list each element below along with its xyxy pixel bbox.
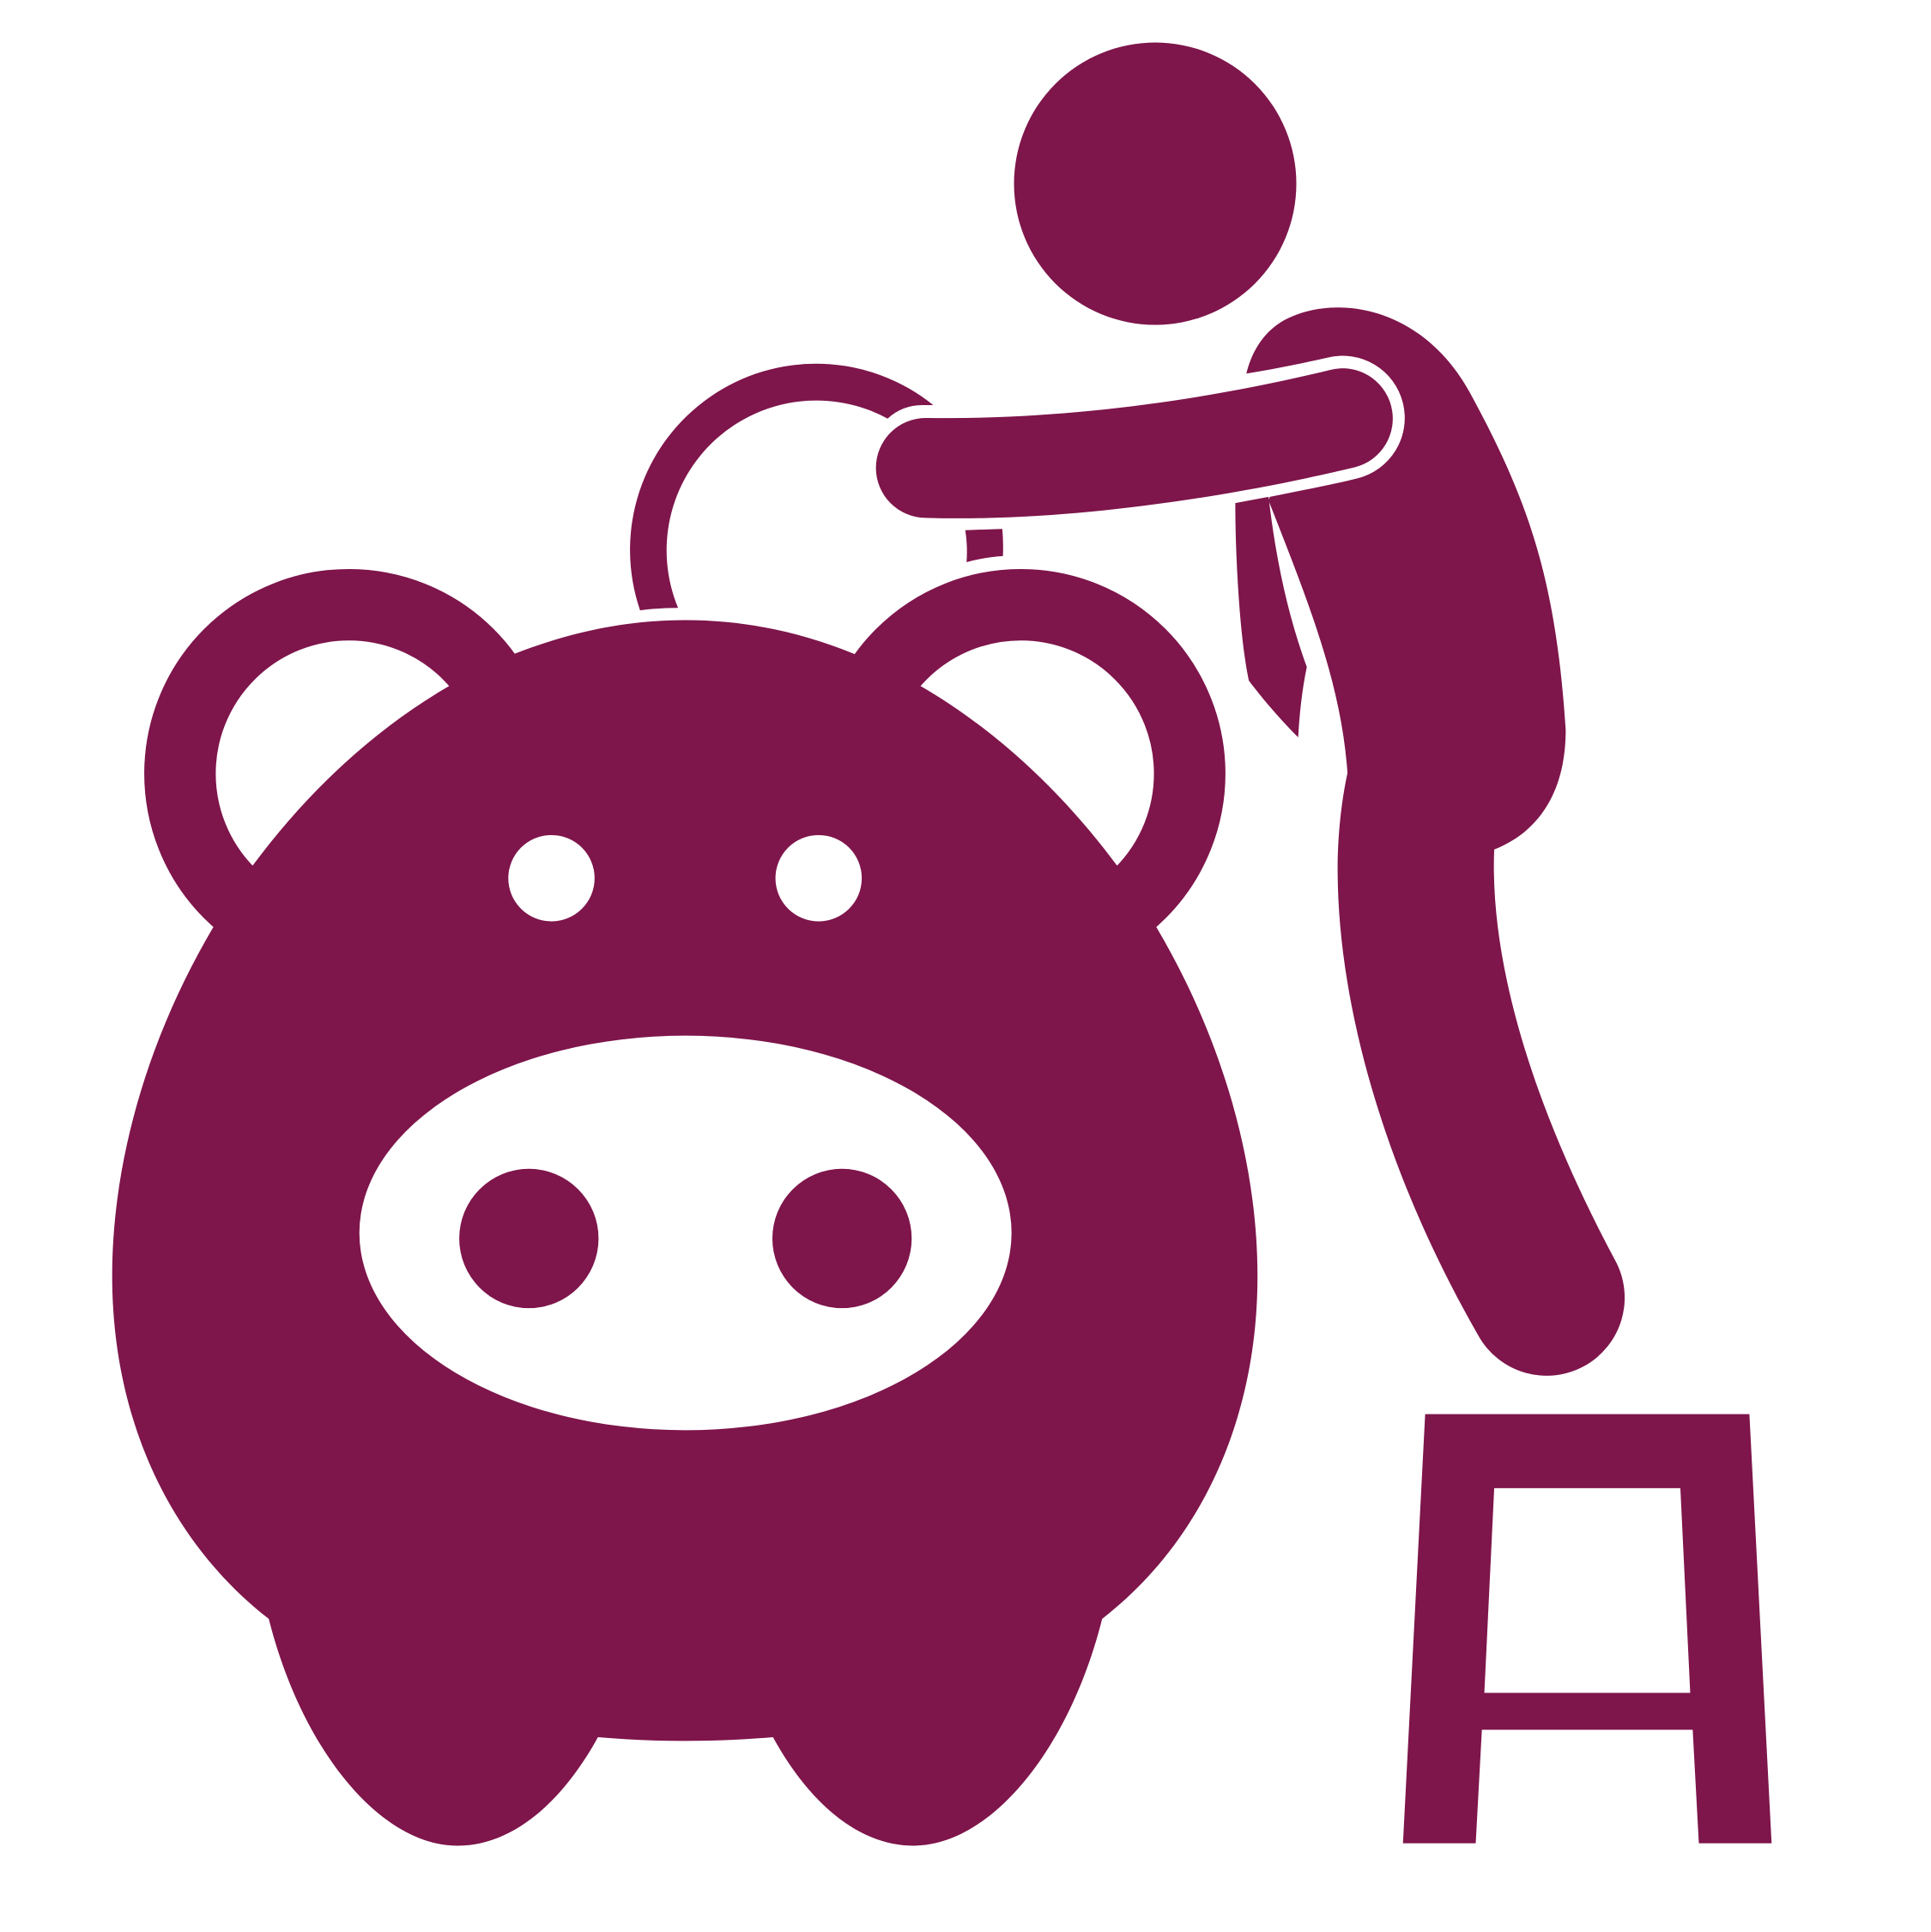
far arm and back leg sliver [1235,497,1307,737]
right ear [852,605,1189,942]
right nostril [772,1169,911,1308]
torso and leg [1246,307,1625,1376]
pig body [112,621,1257,1845]
head [1014,43,1296,325]
snout [360,1036,1012,1430]
icon: coin ring [630,364,1003,610]
left eye [508,835,595,921]
icon: person [876,43,1625,1376]
icon: ladder [1403,1414,1771,1844]
coin right fragment [966,529,1003,562]
right eye [776,835,862,921]
left ear [180,605,518,942]
coin left arc [630,364,933,610]
icon: piggy bank [112,605,1257,1845]
arm reaching to the coin [876,368,1393,518]
left nostril [459,1169,598,1308]
